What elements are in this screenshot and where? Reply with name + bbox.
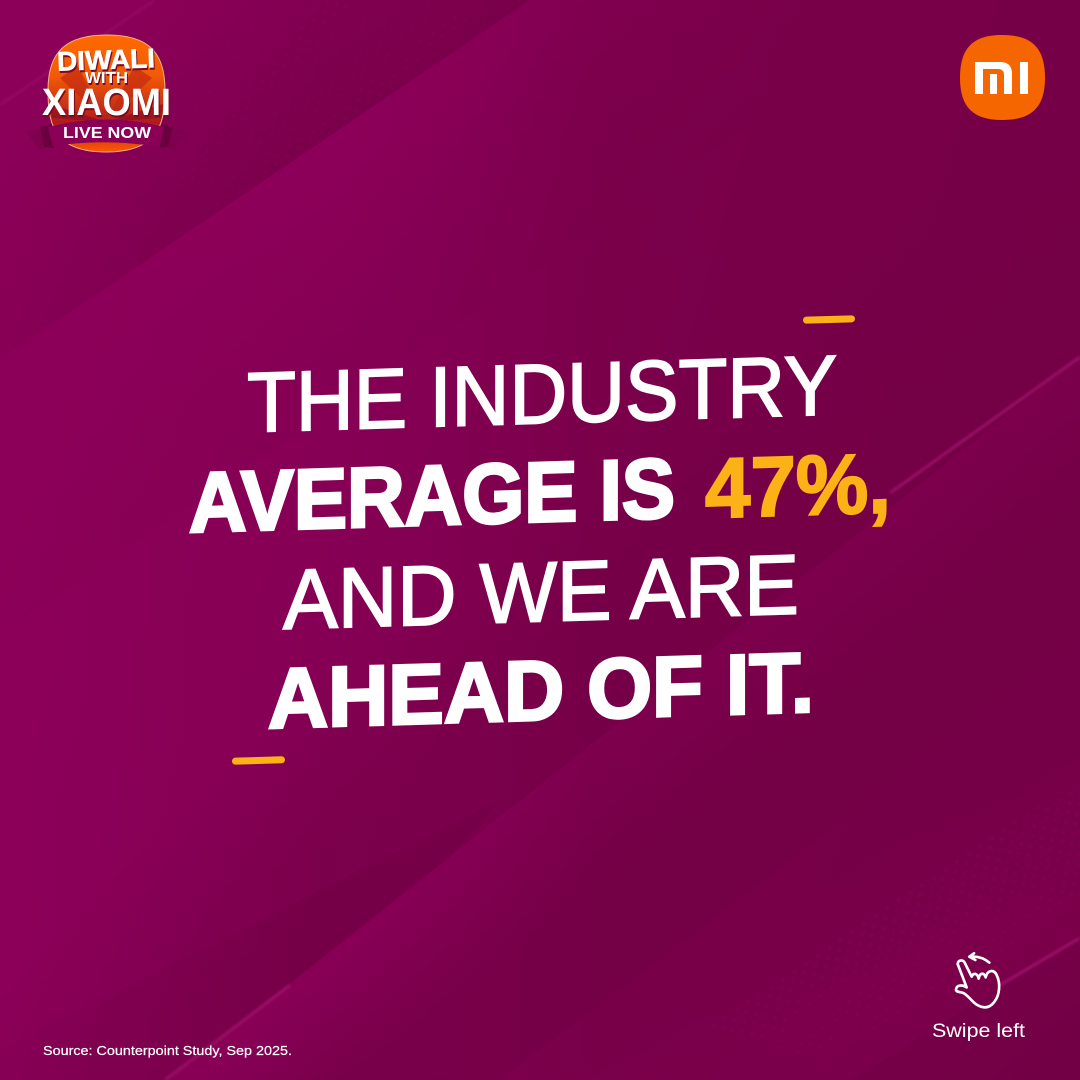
headline: AVERAGE IS — [189, 441, 675, 551]
badge: Diwali with Xiaomi, live now: LIVE NOW — [63, 125, 152, 142]
source note: Source: Counterpoint Study, Sep 2025. — [43, 1044, 292, 1058]
headline: 47%, — [705, 436, 891, 537]
headline: AHEAD OF IT. — [268, 636, 814, 747]
swipe label: Swipe left — [932, 1021, 1026, 1042]
icon: swipe hand — [956, 953, 999, 1007]
badge: Diwali with Xiaomi, live now: DIWALI — [57, 43, 155, 77]
accent dash: bottom — [232, 756, 285, 765]
badge: Diwali with Xiaomi, live now: XIAOMI — [42, 82, 171, 124]
badge: Diwali with Xiaomi, live now: WITH — [85, 70, 128, 87]
badge: Diwali with Xiaomi, live now — [27, 35, 186, 152]
logo: Xiaomi Mi — [960, 35, 1045, 120]
headline: THE INDUSTRY — [247, 338, 837, 451]
headline — [189, 338, 891, 747]
accent dash: top — [803, 315, 855, 324]
headline: AND WE ARE — [283, 538, 799, 648]
